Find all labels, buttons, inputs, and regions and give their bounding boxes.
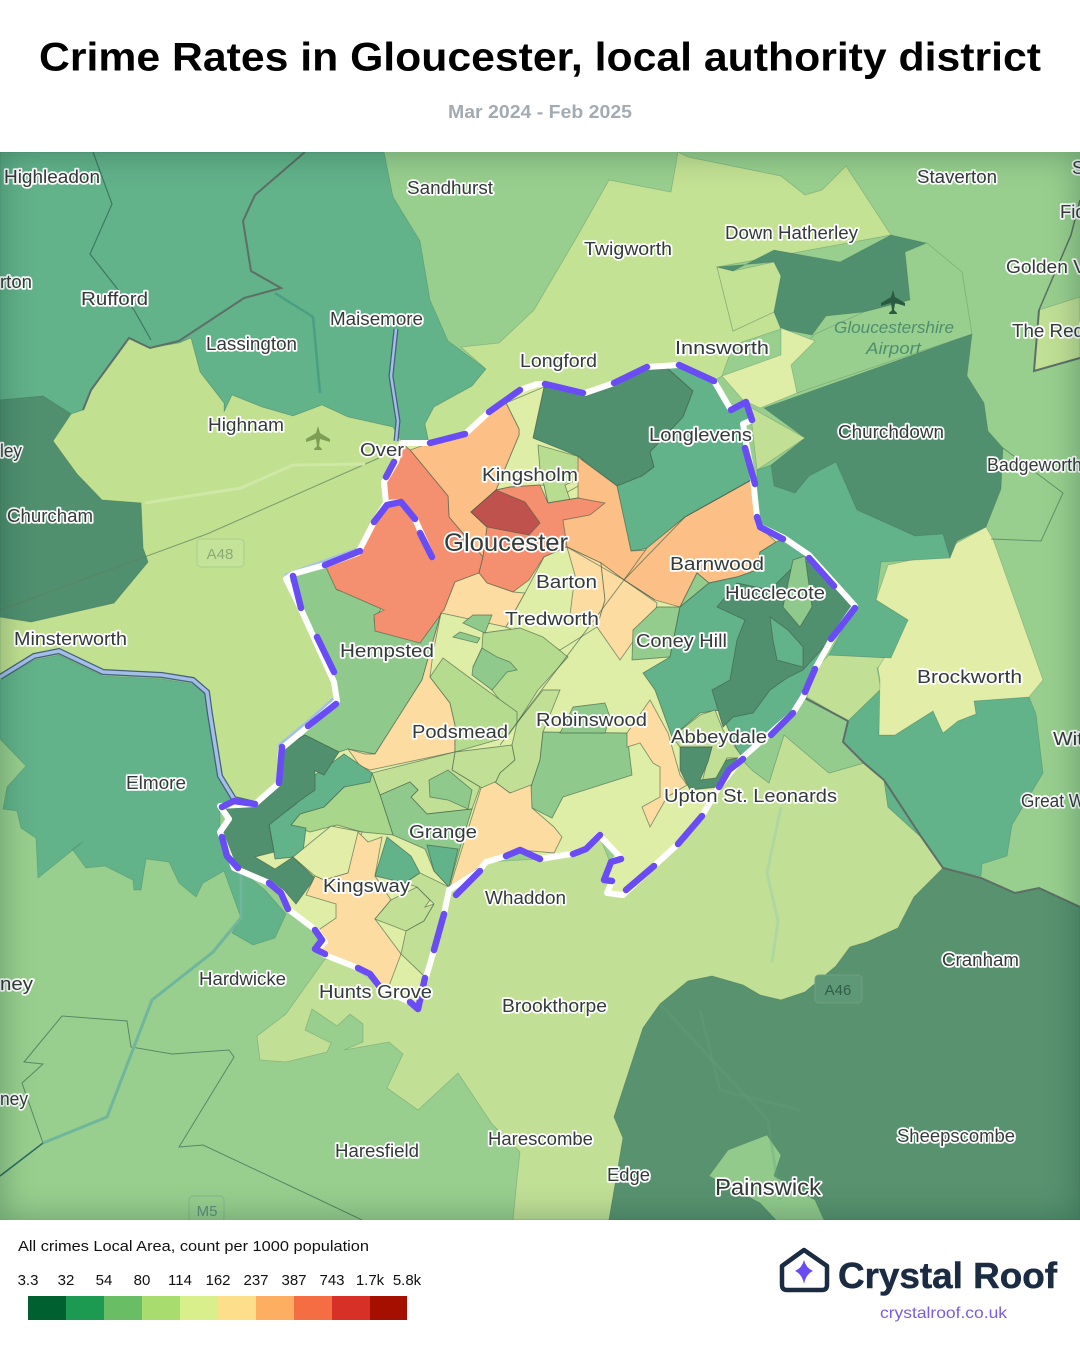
legend scale labels: 5.8k	[393, 1272, 422, 1289]
ward: Hucclecote light	[783, 556, 812, 627]
place labels: Kingsway	[323, 875, 411, 896]
ward: Hucclecote inner teal	[770, 617, 803, 667]
ward: Barton pale	[567, 547, 605, 627]
ward: Podsmead east	[430, 658, 517, 752]
place labels: Staverton	[917, 166, 997, 187]
place labels: Haresfield	[335, 1140, 419, 1161]
place labels: Grange	[409, 821, 477, 842]
river and boundary lines	[0, 152, 1080, 1220]
ward: Robinswood	[530, 732, 632, 818]
place labels: Gloucester	[444, 529, 568, 557]
ward: Kingsholm	[496, 387, 594, 503]
ward: Kingsway green	[375, 837, 420, 883]
road shield M5	[189, 1196, 224, 1222]
legend colour swatches	[28, 1296, 407, 1320]
place labels: Elmore	[126, 772, 186, 793]
ward: south lower light	[452, 745, 515, 790]
Gloucester district choropleth	[220, 365, 855, 1009]
logo: Crystal Roof	[780, 1248, 1058, 1322]
ward: Tredworth patch	[463, 615, 492, 633]
place labels: Maisemore	[330, 308, 423, 329]
place labels: Rufford	[81, 288, 148, 309]
ward: salmon centre	[471, 485, 605, 592]
place labels: Harescombe	[488, 1128, 593, 1149]
ward: peach centre east	[544, 457, 647, 580]
ward: salmon west	[325, 443, 483, 643]
ward: Tredworth green	[472, 648, 517, 690]
ward: Westgate	[471, 490, 540, 535]
logo url: crystalroof.co.uk	[880, 1305, 1008, 1322]
place labels: Abbeydale	[671, 726, 767, 747]
place labels: Over	[360, 439, 404, 460]
road shield A46: A46	[825, 982, 851, 999]
title: Crime Rates in Gloucester, local authority district	[39, 36, 1041, 80]
place labels: ney	[0, 973, 34, 994]
place labels: Tredworth	[505, 608, 599, 629]
road shield A48: A48	[207, 546, 233, 563]
place labels: Brookthorpe	[502, 995, 607, 1016]
place labels: Lassington	[206, 333, 297, 354]
legend scale labels: 1.7k	[356, 1272, 385, 1289]
ward: Barton	[506, 547, 605, 650]
place labels: Minsterworth	[14, 628, 127, 649]
ward: Grange inner	[429, 770, 472, 809]
road line	[500, 477, 757, 745]
subtitle: date range: Mar 2024 - Feb 2025	[448, 102, 632, 122]
place labels: ley	[0, 440, 23, 461]
ward: Grange	[380, 782, 472, 887]
ward: Hucclecote	[643, 538, 855, 759]
place labels: Churcham	[7, 505, 93, 526]
place labels: Longlevens	[649, 424, 752, 445]
place labels	[0, 157, 1080, 1200]
place labels: Sandhurst	[407, 177, 493, 198]
place labels: Hucclecote	[725, 582, 825, 603]
place labels: Hempsted	[340, 640, 434, 661]
legend scale labels: 237	[243, 1272, 269, 1289]
icon: airplane Gloucestershire Airport	[881, 290, 905, 314]
ward: Kingsway west	[293, 826, 362, 880]
place labels: Robinswood	[536, 709, 647, 730]
place labels: Edge	[607, 1164, 650, 1185]
ward: Severn Vale teal	[269, 754, 372, 859]
icon: airplane Highnam	[306, 426, 330, 450]
ward: Kingsholm small	[538, 445, 594, 503]
legend scale labels: 80	[134, 1272, 150, 1289]
place labels: Highnam	[208, 414, 284, 435]
ward: pale Coney	[597, 563, 657, 660]
place labels: Upton St. Leonards	[664, 785, 837, 806]
legend scale labels: 32	[58, 1272, 74, 1289]
place labels: Kingsholm	[482, 464, 578, 485]
place labels: Hardwicke	[199, 968, 286, 989]
place labels: Painswick	[715, 1174, 822, 1200]
ward: Abbeydale light	[672, 710, 743, 782]
ward: Severn Vale dark	[220, 735, 339, 904]
ward: Kingsway east	[375, 887, 434, 931]
place labels: Cranham	[942, 949, 1019, 970]
logo wordmark: Crystal Roof	[838, 1255, 1058, 1296]
ward: Lower Tuffley	[372, 752, 480, 814]
ward: Podsmead	[348, 613, 455, 770]
legend title: All crimes Local Area, count per 1000 population	[18, 1238, 369, 1255]
outer area choropleth	[0, 152, 1080, 1220]
ward: Matson	[449, 782, 562, 890]
place labels: Innsworth	[675, 337, 769, 358]
label: Gloucestershire Airport: Airport	[865, 339, 922, 358]
place labels: ney	[0, 1088, 29, 1109]
ward: Hempsted	[281, 565, 441, 754]
place labels: Barnwood	[670, 553, 764, 574]
legend	[18, 1238, 422, 1320]
legend scale labels: 162	[205, 1272, 231, 1289]
legend scale labels: 387	[281, 1272, 307, 1289]
ward: Longlevens	[617, 365, 753, 551]
place labels: Coney Hill	[636, 630, 727, 651]
ward: Robinswood north	[560, 703, 610, 733]
legend scale labels: 114	[168, 1272, 192, 1289]
legend scale labels: 54	[96, 1272, 112, 1289]
ward: pale west	[441, 573, 525, 627]
place labels: Barton	[536, 571, 597, 592]
ward: Abbeydale pale	[627, 700, 687, 827]
ward: Grange teal	[427, 845, 458, 887]
label: Gloucestershire Airport	[834, 318, 954, 358]
place labels: rton	[0, 271, 32, 292]
ward: central mid green	[473, 628, 568, 723]
ward: Tredworth strip	[453, 632, 480, 643]
legend scale labels: 3.3	[18, 1272, 38, 1289]
icon: house with star	[782, 1250, 827, 1290]
road shield M5: M5	[197, 1203, 217, 1220]
map edge shading	[0, 152, 1080, 1220]
place labels: Brockworth	[917, 666, 1022, 687]
ward: Hucclecote dark	[712, 560, 853, 727]
place labels: Churchdown	[838, 421, 944, 442]
place labels: Highleadon	[4, 166, 100, 187]
ward: Abbeydale dark	[680, 747, 738, 790]
ward: peach north	[410, 403, 519, 557]
place labels: Down Hatherley	[725, 222, 859, 243]
label: Gloucestershire Airport: Gloucestershire	[834, 318, 954, 337]
place labels: Twigworth	[584, 238, 672, 259]
road shield A46	[815, 975, 862, 1003]
place labels: Wit	[1053, 728, 1080, 749]
map panel	[0, 152, 1080, 1220]
place labels: Hunts Grove	[319, 981, 432, 1002]
place labels: Sheepscombe	[897, 1125, 1015, 1146]
ward: Coney Hill	[632, 573, 709, 660]
legend scale labels: 743	[319, 1272, 345, 1289]
ward: Longlevens north	[533, 366, 693, 486]
place labels: Podsmead	[412, 721, 508, 742]
district boundary: purple dashes	[222, 365, 855, 1009]
ward: south mid	[492, 690, 560, 793]
ward: Quedgeley	[291, 773, 393, 835]
district boundary: white casing	[220, 365, 855, 1009]
ward: Kingsway	[306, 832, 401, 986]
place labels: Whaddon	[485, 887, 566, 908]
ward: Kingsway south	[401, 873, 449, 977]
road shield A48	[197, 539, 244, 567]
place labels: Longford	[520, 350, 597, 371]
legend scale labels	[18, 1272, 422, 1289]
ward: Barnwood	[624, 479, 776, 607]
